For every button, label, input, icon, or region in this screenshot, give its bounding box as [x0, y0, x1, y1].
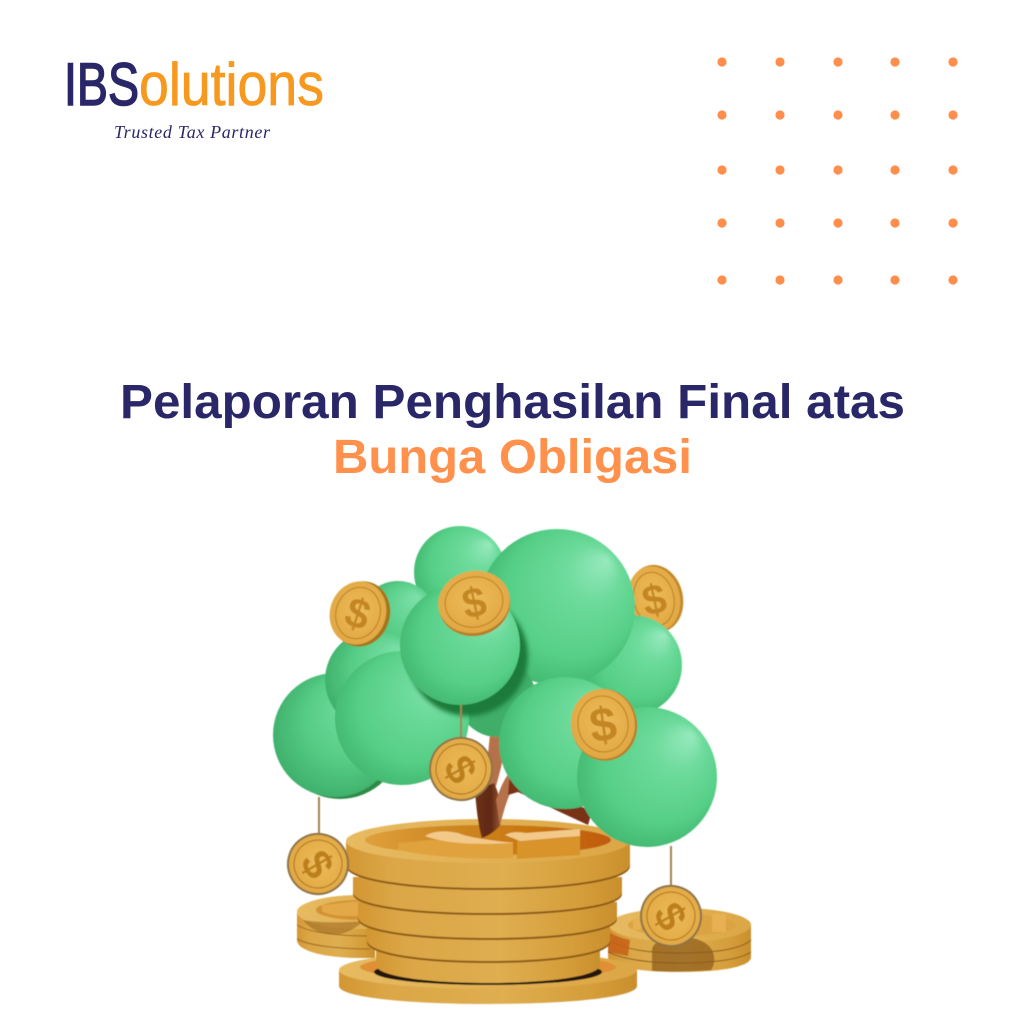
back foliage [414, 526, 506, 618]
coin: top centre: $ [458, 577, 490, 628]
big top foliage [479, 529, 635, 685]
lower centre foliage [458, 659, 536, 737]
coin: top left: $ [339, 588, 376, 639]
coin: hanging left [277, 823, 359, 905]
illustration: money tree [273, 526, 751, 1004]
coin: hanging left: $ [291, 842, 344, 886]
coin: hanging right [630, 875, 712, 957]
foliage right [582, 615, 682, 715]
middle right foliage [499, 677, 631, 809]
coin 3 [358, 902, 617, 940]
coin 2 [353, 877, 622, 915]
main coin stack [346, 819, 630, 983]
centre foliage [400, 585, 520, 705]
coin: top centre [432, 564, 516, 643]
title line 1: Pelaporan Penghasilan Final atas [120, 376, 905, 429]
coin: hanging centre [419, 727, 503, 811]
coin behind foliage, top right [621, 560, 689, 638]
lower left foliage [335, 651, 469, 785]
left coin stack [297, 895, 423, 958]
logo [64, 51, 324, 142]
tree trunk and branches [475, 735, 592, 838]
right coin stack [608, 908, 751, 972]
dot grid decoration [717, 57, 958, 285]
logo wordmark [64, 51, 324, 118]
coin: right [566, 685, 642, 765]
lower right foliage [577, 707, 717, 847]
tree canopy [273, 526, 717, 847]
coin 1 [346, 819, 630, 890]
shadow under centre foliage [408, 596, 528, 716]
coin: right: $ [586, 697, 620, 754]
mid left foliage [325, 630, 425, 730]
coin 5 [376, 945, 600, 983]
title line 2: Bunga Obligasi [333, 431, 692, 484]
strings [319, 705, 671, 886]
coin: hanging centre: $ [434, 747, 487, 791]
far left foliage [278, 675, 402, 799]
logo wordmark: olutions [139, 51, 324, 118]
coin: hanging right: $ [644, 894, 697, 938]
coin 4 [367, 924, 610, 963]
title [120, 376, 905, 484]
base coin [339, 951, 637, 1004]
logo wordmark: IBS [64, 51, 139, 118]
coin behind foliage, top right: $ [638, 574, 670, 625]
logo tagline: Trusted Tax Partner [114, 122, 271, 142]
coin: top left [321, 573, 399, 654]
